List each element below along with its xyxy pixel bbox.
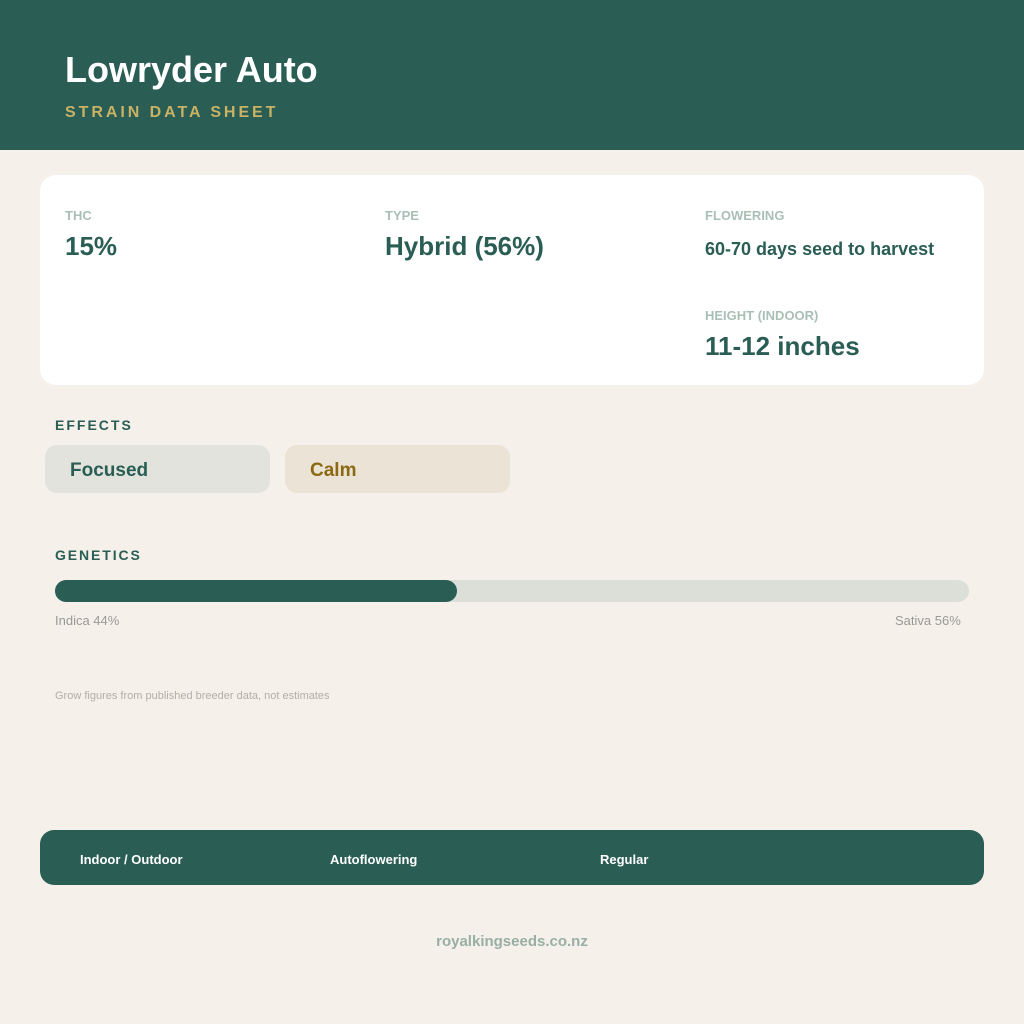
stat label: THC: THC bbox=[65, 208, 92, 223]
stat value: type: Hybrid (56%) bbox=[385, 231, 544, 261]
effect chip: focused bbox=[45, 445, 270, 493]
website: royalkingseeds.co.nz bbox=[436, 933, 588, 950]
indica bar fill bbox=[55, 580, 457, 602]
stat label: height: HEIGHT (INDOOR) bbox=[705, 308, 818, 323]
header band bbox=[0, 0, 1024, 150]
genetics bar bbox=[55, 580, 969, 602]
footer feature band bbox=[40, 830, 984, 885]
heading: effects: EFFECTS bbox=[55, 417, 133, 433]
stat label: flowering: FLOWERING bbox=[705, 208, 784, 223]
panel: strain stats bbox=[40, 175, 984, 385]
stat value: flowering: 60-70 days seed to harvest bbox=[705, 239, 934, 259]
chip text: calm: Calm bbox=[310, 460, 356, 481]
stat value: THC: 15% bbox=[65, 231, 117, 261]
feature: seed type: Regular bbox=[600, 852, 648, 867]
chip text: focused: Focused bbox=[70, 460, 148, 481]
stat label: type: TYPE bbox=[385, 208, 419, 223]
bar label: indica: Indica 44% bbox=[55, 613, 119, 628]
title: Lowryder Auto bbox=[65, 49, 318, 90]
source note: Grow figures from published breeder data, not estimates bbox=[55, 690, 330, 702]
heading: genetics: GENETICS bbox=[55, 547, 142, 563]
bar label: sativa: Sativa 56% bbox=[895, 613, 961, 628]
feature: environment: Indoor / Outdoor bbox=[80, 852, 183, 867]
subtitle: STRAIN DATA SHEET bbox=[65, 104, 278, 121]
feature: autoflowering: Autoflowering bbox=[330, 852, 417, 867]
effect chip: calm bbox=[285, 445, 510, 493]
stat value: height: 11-12 inches bbox=[705, 331, 860, 361]
